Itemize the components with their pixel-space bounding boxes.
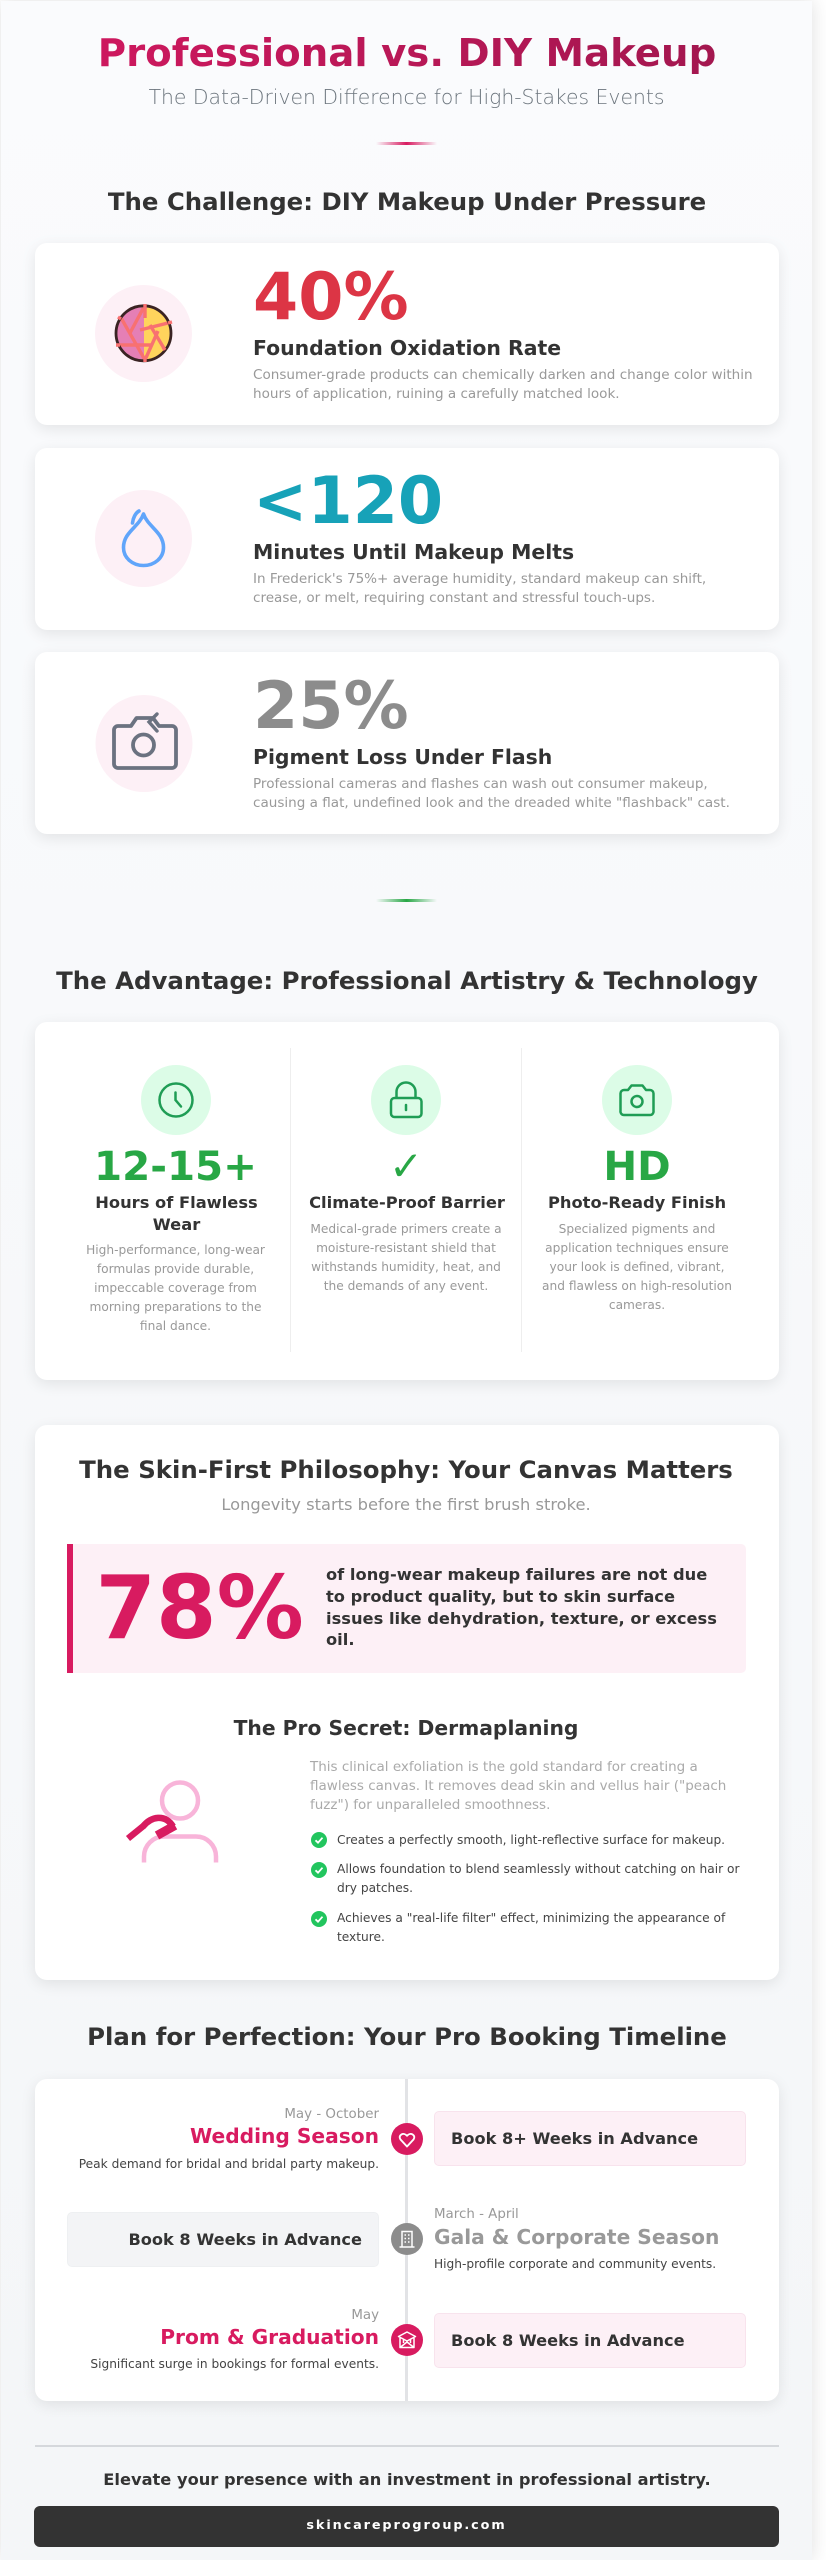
description: causing a flat, undefined look and the dreaded white "flashback" cast. bbox=[253, 794, 730, 810]
divider: green bbox=[376, 899, 437, 902]
description: In Frederick's 75%+ average humidity, standard makeup can shift, bbox=[253, 570, 706, 586]
callout text: issues like dehydration, texture, or excess bbox=[326, 1609, 717, 1628]
stat title: Minutes Until Makeup Melts bbox=[253, 540, 574, 564]
callout text: of long-wear makeup failures are not due bbox=[326, 1565, 707, 1584]
stat: 78%: 78% bbox=[96, 1556, 304, 1658]
stat title: Pigment Loss Under Flash bbox=[253, 745, 552, 769]
bullet 3 bbox=[337, 1911, 726, 1944]
stat title: Photo-Ready Finish bbox=[548, 1193, 726, 1212]
booking box bbox=[67, 2212, 379, 2267]
footer url bar: skincareprogroup.com bbox=[306, 2518, 507, 2533]
icon: clock bbox=[141, 1065, 211, 1135]
description: application techniques ensure bbox=[545, 1240, 729, 1254]
bullet 3: Achieves a "real-life filter" effect, minimizing the appearance of bbox=[337, 1911, 725, 1925]
icon: camera bbox=[602, 1065, 672, 1135]
footer tagline: Elevate your presence with an investment in professional artistry. bbox=[103, 2470, 711, 2489]
event note: Peak demand for bridal and bridal party makeup. bbox=[79, 2156, 379, 2170]
icon: graduation envelope node bbox=[391, 2324, 423, 2356]
icon: check 1 bbox=[311, 1832, 327, 1848]
description bbox=[310, 1222, 502, 1292]
stat title: Foundation Oxidation Rate bbox=[253, 336, 561, 360]
icon: check 2 bbox=[311, 1862, 327, 1878]
stat: HD: HD bbox=[603, 1142, 671, 1190]
date: May bbox=[351, 2308, 379, 2323]
description: the demands of any event. bbox=[324, 1278, 488, 1292]
description: cameras. bbox=[609, 1298, 665, 1312]
description: flawless canvas. It removes dead skin and vellus hair ("peach bbox=[310, 1778, 726, 1794]
stat title: Wear bbox=[153, 1215, 200, 1234]
bullet 2: Allows foundation to blend seamlessly without catching on hair or bbox=[337, 1862, 739, 1876]
description bbox=[253, 776, 730, 810]
stat: less than 120: <120 bbox=[253, 464, 443, 538]
heading: booking timeline: Plan for Perfection: Your Pro Booking Timeline bbox=[87, 2022, 727, 2051]
icon: oxidized compact bbox=[95, 285, 192, 382]
stat: check mark: ✓ bbox=[389, 1142, 423, 1190]
event note: High-profile corporate and community events. bbox=[434, 2256, 716, 2270]
description: Specialized pigments and bbox=[559, 1222, 715, 1236]
description: withstands humidity, heat, and bbox=[311, 1260, 501, 1274]
panel: flash pigment loss bbox=[35, 652, 779, 834]
description: formulas provide durable, bbox=[97, 1262, 254, 1276]
description: crease, or melt, requiring constant and stressful touch-ups. bbox=[253, 590, 655, 606]
icon: dermaplaning person bbox=[126, 1780, 218, 1862]
timeline spine bbox=[405, 2079, 408, 2401]
bullet 1: Creates a perfectly smooth, light-reflective surface for makeup. bbox=[337, 1832, 725, 1846]
stat title: Hours of Flawless bbox=[95, 1193, 258, 1212]
description: hours of application, ruining a carefully matched look. bbox=[253, 386, 620, 402]
stat: 12-15+: 12-15+ bbox=[94, 1142, 257, 1190]
event note: Significant surge in bookings for formal events. bbox=[90, 2357, 379, 2371]
date: May - October bbox=[284, 2107, 379, 2122]
icon: building node bbox=[391, 2223, 423, 2255]
icon: camera with flash bbox=[96, 695, 192, 792]
divider: pink bbox=[376, 142, 437, 145]
panel: professional advantages bbox=[35, 1022, 779, 1380]
callout text bbox=[326, 1565, 717, 1649]
description: Consumer-grade products can chemically darken and change color within bbox=[253, 366, 753, 382]
stat: 40%: 40% bbox=[253, 260, 409, 334]
stat title bbox=[95, 1193, 258, 1234]
heading: the challenge: The Challenge: DIY Makeup Under Pressure bbox=[108, 187, 706, 216]
description bbox=[86, 1242, 265, 1332]
panel: booking timeline bbox=[35, 2079, 779, 2401]
icon: lock bbox=[371, 1065, 441, 1135]
description bbox=[253, 366, 753, 402]
description: impeccable coverage from bbox=[94, 1280, 257, 1294]
description: This clinical exfoliation is the gold standard for creating a bbox=[310, 1758, 698, 1774]
subheading: Longevity starts before the first brush stroke. bbox=[221, 1495, 591, 1514]
description: final dance. bbox=[140, 1318, 211, 1332]
heading: the advantage: The Advantage: Professional Artistry & Technology bbox=[56, 966, 758, 995]
description: and flawless on high-resolution bbox=[542, 1278, 732, 1292]
footer rule bbox=[35, 2445, 779, 2447]
panel: skin-first philosophy bbox=[35, 1424, 779, 1980]
description: High-performance, long-wear bbox=[86, 1242, 265, 1256]
description: your look is defined, vibrant, bbox=[550, 1260, 724, 1274]
icon: water drop bbox=[95, 490, 192, 587]
description bbox=[310, 1758, 726, 1812]
description: Professional cameras and flashes can wash out consumer makeup, bbox=[253, 776, 708, 792]
title: Professional vs. DIY Makeup bbox=[98, 31, 716, 76]
heading: The Skin-First Philosophy: Your Canvas Matters bbox=[79, 1455, 733, 1484]
column: hours of wear bbox=[61, 1048, 291, 1352]
callout: 78 percent bbox=[67, 1544, 746, 1673]
event name: Gala & Corporate Season bbox=[434, 2224, 719, 2248]
column: climate barrier bbox=[291, 1048, 522, 1352]
date: March - April bbox=[434, 2207, 519, 2222]
stat: 25%: 25% bbox=[253, 668, 409, 744]
column: photo ready bbox=[542, 1065, 732, 1312]
row: wedding season bbox=[79, 2107, 746, 2170]
booking box bbox=[434, 2111, 746, 2166]
icon: heart node bbox=[391, 2123, 423, 2155]
booking box bbox=[434, 2312, 746, 2368]
bullet 2 bbox=[337, 1862, 740, 1895]
description: Medical-grade primers create a bbox=[310, 1222, 502, 1236]
panel: foundation oxidation bbox=[35, 243, 779, 425]
booking box: Book 8 Weeks in Advance bbox=[451, 2330, 685, 2350]
icon: check 3 bbox=[311, 1911, 327, 1927]
footer url bar bbox=[34, 2506, 779, 2546]
booking box: Book 8+ Weeks in Advance bbox=[451, 2129, 698, 2148]
bullet 2: dry patches. bbox=[337, 1881, 413, 1895]
callout text: oil. bbox=[326, 1630, 355, 1649]
subtitle: The Data-Driven Difference for High-Stakes Events bbox=[149, 85, 664, 109]
event name: Prom & Graduation bbox=[160, 2325, 379, 2349]
description: moisture-resistant shield that bbox=[316, 1240, 496, 1254]
booking box: Book 8 Weeks in Advance bbox=[128, 2230, 362, 2249]
bullet 3: texture. bbox=[337, 1930, 385, 1944]
description: morning preparations to the bbox=[90, 1300, 261, 1314]
description: fuzz") for unparalleled smoothness. bbox=[310, 1796, 550, 1812]
subheading: pro secret: The Pro Secret: Dermaplaning bbox=[234, 1716, 578, 1740]
row: prom and graduation bbox=[90, 2308, 746, 2371]
description bbox=[542, 1222, 732, 1312]
panel: humidity melt bbox=[35, 448, 779, 630]
callout text: to product quality, but to skin surface bbox=[326, 1587, 675, 1606]
event name: Wedding Season bbox=[190, 2124, 379, 2148]
description bbox=[253, 570, 706, 606]
stat title: Climate-Proof Barrier bbox=[309, 1193, 505, 1212]
row: gala and corporate season bbox=[67, 2207, 719, 2270]
